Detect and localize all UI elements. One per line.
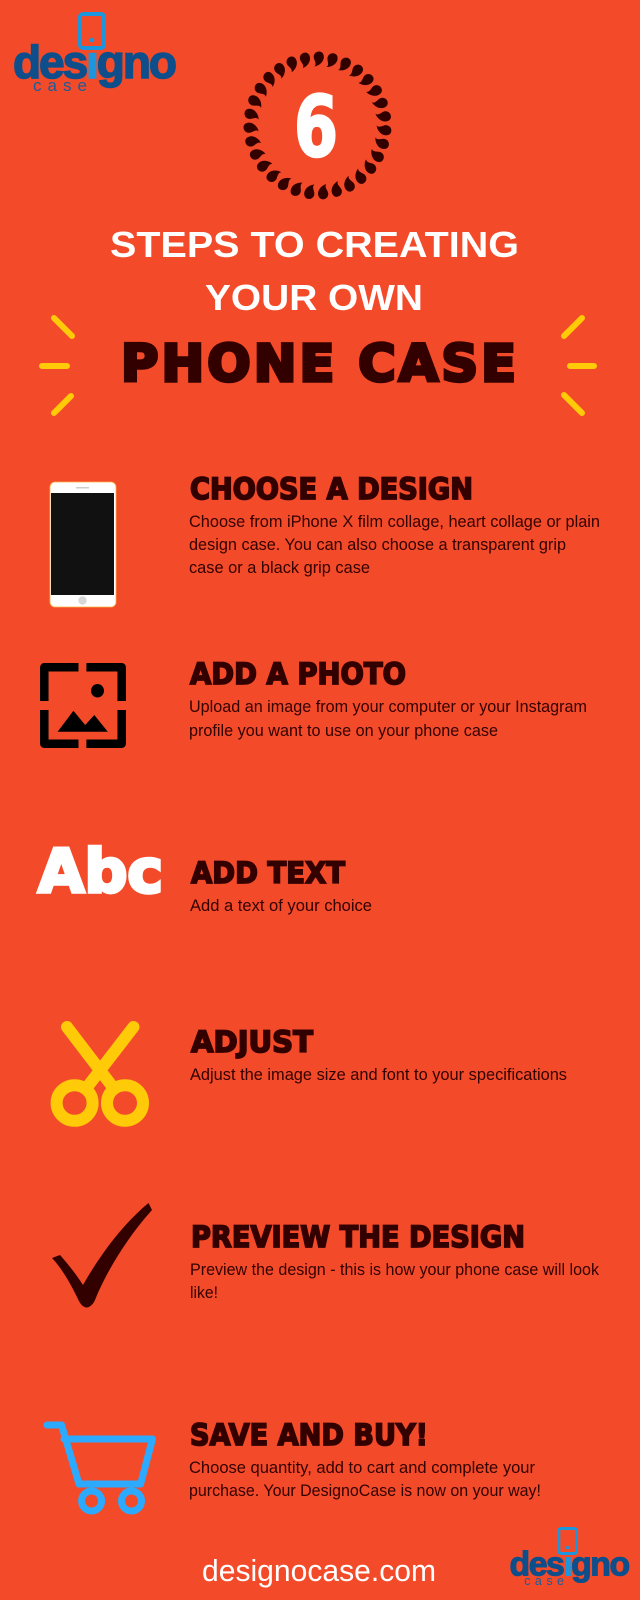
icon: phone [50,482,116,607]
step 2: add a photo [44,657,587,744]
title [110,224,519,394]
step 4: adjust [57,1025,567,1121]
decorative yellow sparks [42,318,594,413]
body text [190,1261,600,1302]
icon: check mark [52,1203,152,1308]
logo: designo case top: designo [13,36,177,88]
step 3: add text [38,837,372,915]
body text [189,513,600,577]
heading: CHOOSE A DESIGN [190,472,473,506]
title: YOUR OWN [205,277,423,318]
heading: SAVE AND BUY! [190,1418,428,1452]
title: STEPS TO CREATING [110,224,519,265]
logo: designo case bottom [510,1528,630,1588]
icon: Abc: Abc [38,837,163,907]
body text: Choose quantity, add to cart and complete your [189,1459,535,1477]
heading: PREVIEW THE DESIGN [191,1220,525,1254]
heading: ADJUST [191,1025,313,1059]
logo: designo case top: case [33,76,87,95]
heading: ADD TEXT [191,856,345,890]
icon: ring of droplets with number 6: 6 [294,78,338,176]
icon: ring of droplets with number 6 [243,51,392,200]
heading: ADD A PHOTO [190,657,406,691]
step 6: save and buy [47,1418,541,1511]
body text: Preview the design - this is how your phone case will look [190,1261,600,1279]
body text: Adjust the image size and font to your specifications [190,1066,567,1084]
body text: Upload an image from your computer or your Instagram [189,698,587,716]
icon: scissors [57,1027,143,1121]
step 5: preview the design [52,1203,600,1308]
icon: photo frame [44,667,122,744]
body text: design case. You can also choose a transparent grip [189,536,566,554]
step 1: choose a design [50,472,600,607]
title: PHONE CASE [121,335,516,394]
icon: shopping cart [47,1425,152,1511]
body text: Choose from iPhone X film collage, heart collage or plain [189,513,600,531]
logo: designo case bottom: case [524,1574,564,1588]
body text: Add a text of your choice [190,897,372,915]
logo: designo case bottom: designo [510,1546,630,1584]
body text [189,698,587,740]
logo: designo case top [13,14,177,95]
body text: case or a black grip case [189,559,370,577]
body text: purchase. Your DesignoCase is now on your way! [189,1482,541,1500]
body text [189,1459,541,1500]
body text: profile you want to use on your phone case [189,722,498,740]
body text: like! [190,1284,218,1302]
website url: designocase.com [202,1553,436,1588]
